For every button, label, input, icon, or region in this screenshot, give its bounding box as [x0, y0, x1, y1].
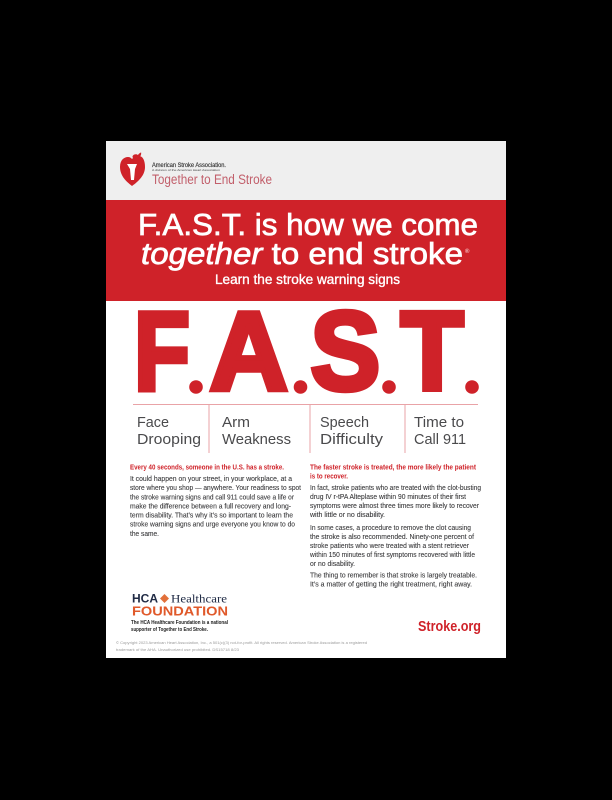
left text column: the stroke warning signs and call 911 could save a life or — [130, 494, 295, 502]
right text column: is to recover. — [310, 472, 348, 480]
copyright notice — [116, 641, 367, 652]
HCA Healthcare Foundation logo — [131, 592, 229, 633]
copyright notice: © Copyright 2023 American Heart Association, Inc., a 501(c)(3) not-for-profit. All rights reserved. American Stroke Association is a registered — [116, 641, 367, 645]
label: face drooping: Drooping — [137, 431, 201, 448]
copyright notice: trademark of the AHA. Unauthorized use prohibited. DS15718 8/23 — [116, 648, 239, 652]
title: together to end stroke — [141, 237, 463, 271]
logo text — [152, 163, 272, 187]
right text column: In some cases, a procedure to remove the clot causing — [310, 524, 471, 532]
label: arm weakness: Weakness — [222, 431, 291, 448]
icon: HCA star — [160, 594, 169, 603]
HCA Healthcare Foundation logo: FOUNDATION — [132, 604, 228, 618]
red title banner — [106, 200, 506, 301]
large F.A.S.T. acronym — [134, 289, 479, 413]
website link: Stroke.org — [418, 619, 481, 635]
label: arm weakness — [222, 414, 291, 448]
label: arm weakness: Arm — [222, 414, 250, 431]
left text column: make the difference between a full recovery and long- — [130, 502, 292, 510]
left text column: stroke warning signs and urge everyone you know to do — [130, 520, 295, 528]
large F.A.S.T. acronym: A — [210, 289, 288, 413]
label: face drooping: Face — [137, 414, 169, 431]
label: speech difficulty: Speech — [320, 414, 369, 431]
right text column: symptoms were almost three times more likely to recover — [310, 502, 480, 510]
title: F.A.S.T. is how we come — [138, 208, 478, 242]
HCA Healthcare Foundation logo: supporter of Together to End Stroke. — [131, 627, 209, 633]
right text column — [309, 464, 481, 588]
right text column: The thing to remember is that stroke is largely treatable. — [310, 572, 477, 580]
right text column: or no disability. — [310, 560, 355, 568]
HCA Healthcare Foundation logo: Healthcare — [171, 592, 227, 606]
right text column: It’s a matter of getting the right treatment, right away. — [310, 580, 472, 588]
right text column: stroke patients who were treated with a stent retriever — [310, 542, 470, 550]
logo text: Together to End Stroke — [152, 172, 272, 187]
title: ® — [465, 248, 470, 255]
label: time to call 911: Time to — [414, 414, 464, 431]
icon: heart and torch — [120, 152, 145, 186]
large F.A.S.T. acronym: S — [311, 289, 380, 413]
left text column: store where you shop — anywhere. Your readiness to spot — [130, 484, 301, 492]
HCA Healthcare Foundation logo: HCA — [132, 592, 158, 606]
label: time to call 911: Call 911 — [414, 431, 466, 448]
title — [138, 208, 478, 271]
label: time to call 911 — [414, 414, 466, 448]
large F.A.S.T. acronym: F — [134, 289, 190, 413]
right text column: The faster stroke is treated, the more likely the patient — [310, 464, 477, 472]
label: speech difficulty — [320, 414, 384, 448]
left text column: It could happen on your street, in your workplace, at a — [130, 475, 292, 483]
HCA Healthcare Foundation logo: The HCA Healthcare Foundation is a national — [131, 620, 229, 626]
left text column: term disability. That’s why it’s so important to learn the — [130, 512, 293, 520]
left text column: Every 40 seconds, someone in the U.S. has a stroke. — [130, 464, 284, 472]
logo text: A division of the American Heart Association — [152, 168, 220, 172]
right text column: In fact, stroke patients who are treated with the clot-busting — [310, 484, 481, 492]
label: face drooping — [137, 414, 201, 448]
header logo band — [106, 141, 506, 200]
label: speech difficulty: Difficulty — [320, 431, 384, 448]
right text column: within 150 minutes of first symptoms recovered with little — [309, 551, 475, 559]
logo text: American Stroke Association. — [152, 163, 226, 169]
large F.A.S.T. acronym: T — [401, 289, 463, 413]
subtitle: Learn the stroke warning signs — [215, 272, 400, 287]
left text column: the same. — [130, 530, 159, 538]
right text column: with little or no disability. — [309, 511, 385, 519]
right text column: drug IV r-tPA Alteplase within 90 minutes of their first — [310, 493, 466, 501]
right text column: the stroke is also recommended. Ninety-one percent of — [310, 533, 474, 541]
left text column — [130, 464, 301, 538]
